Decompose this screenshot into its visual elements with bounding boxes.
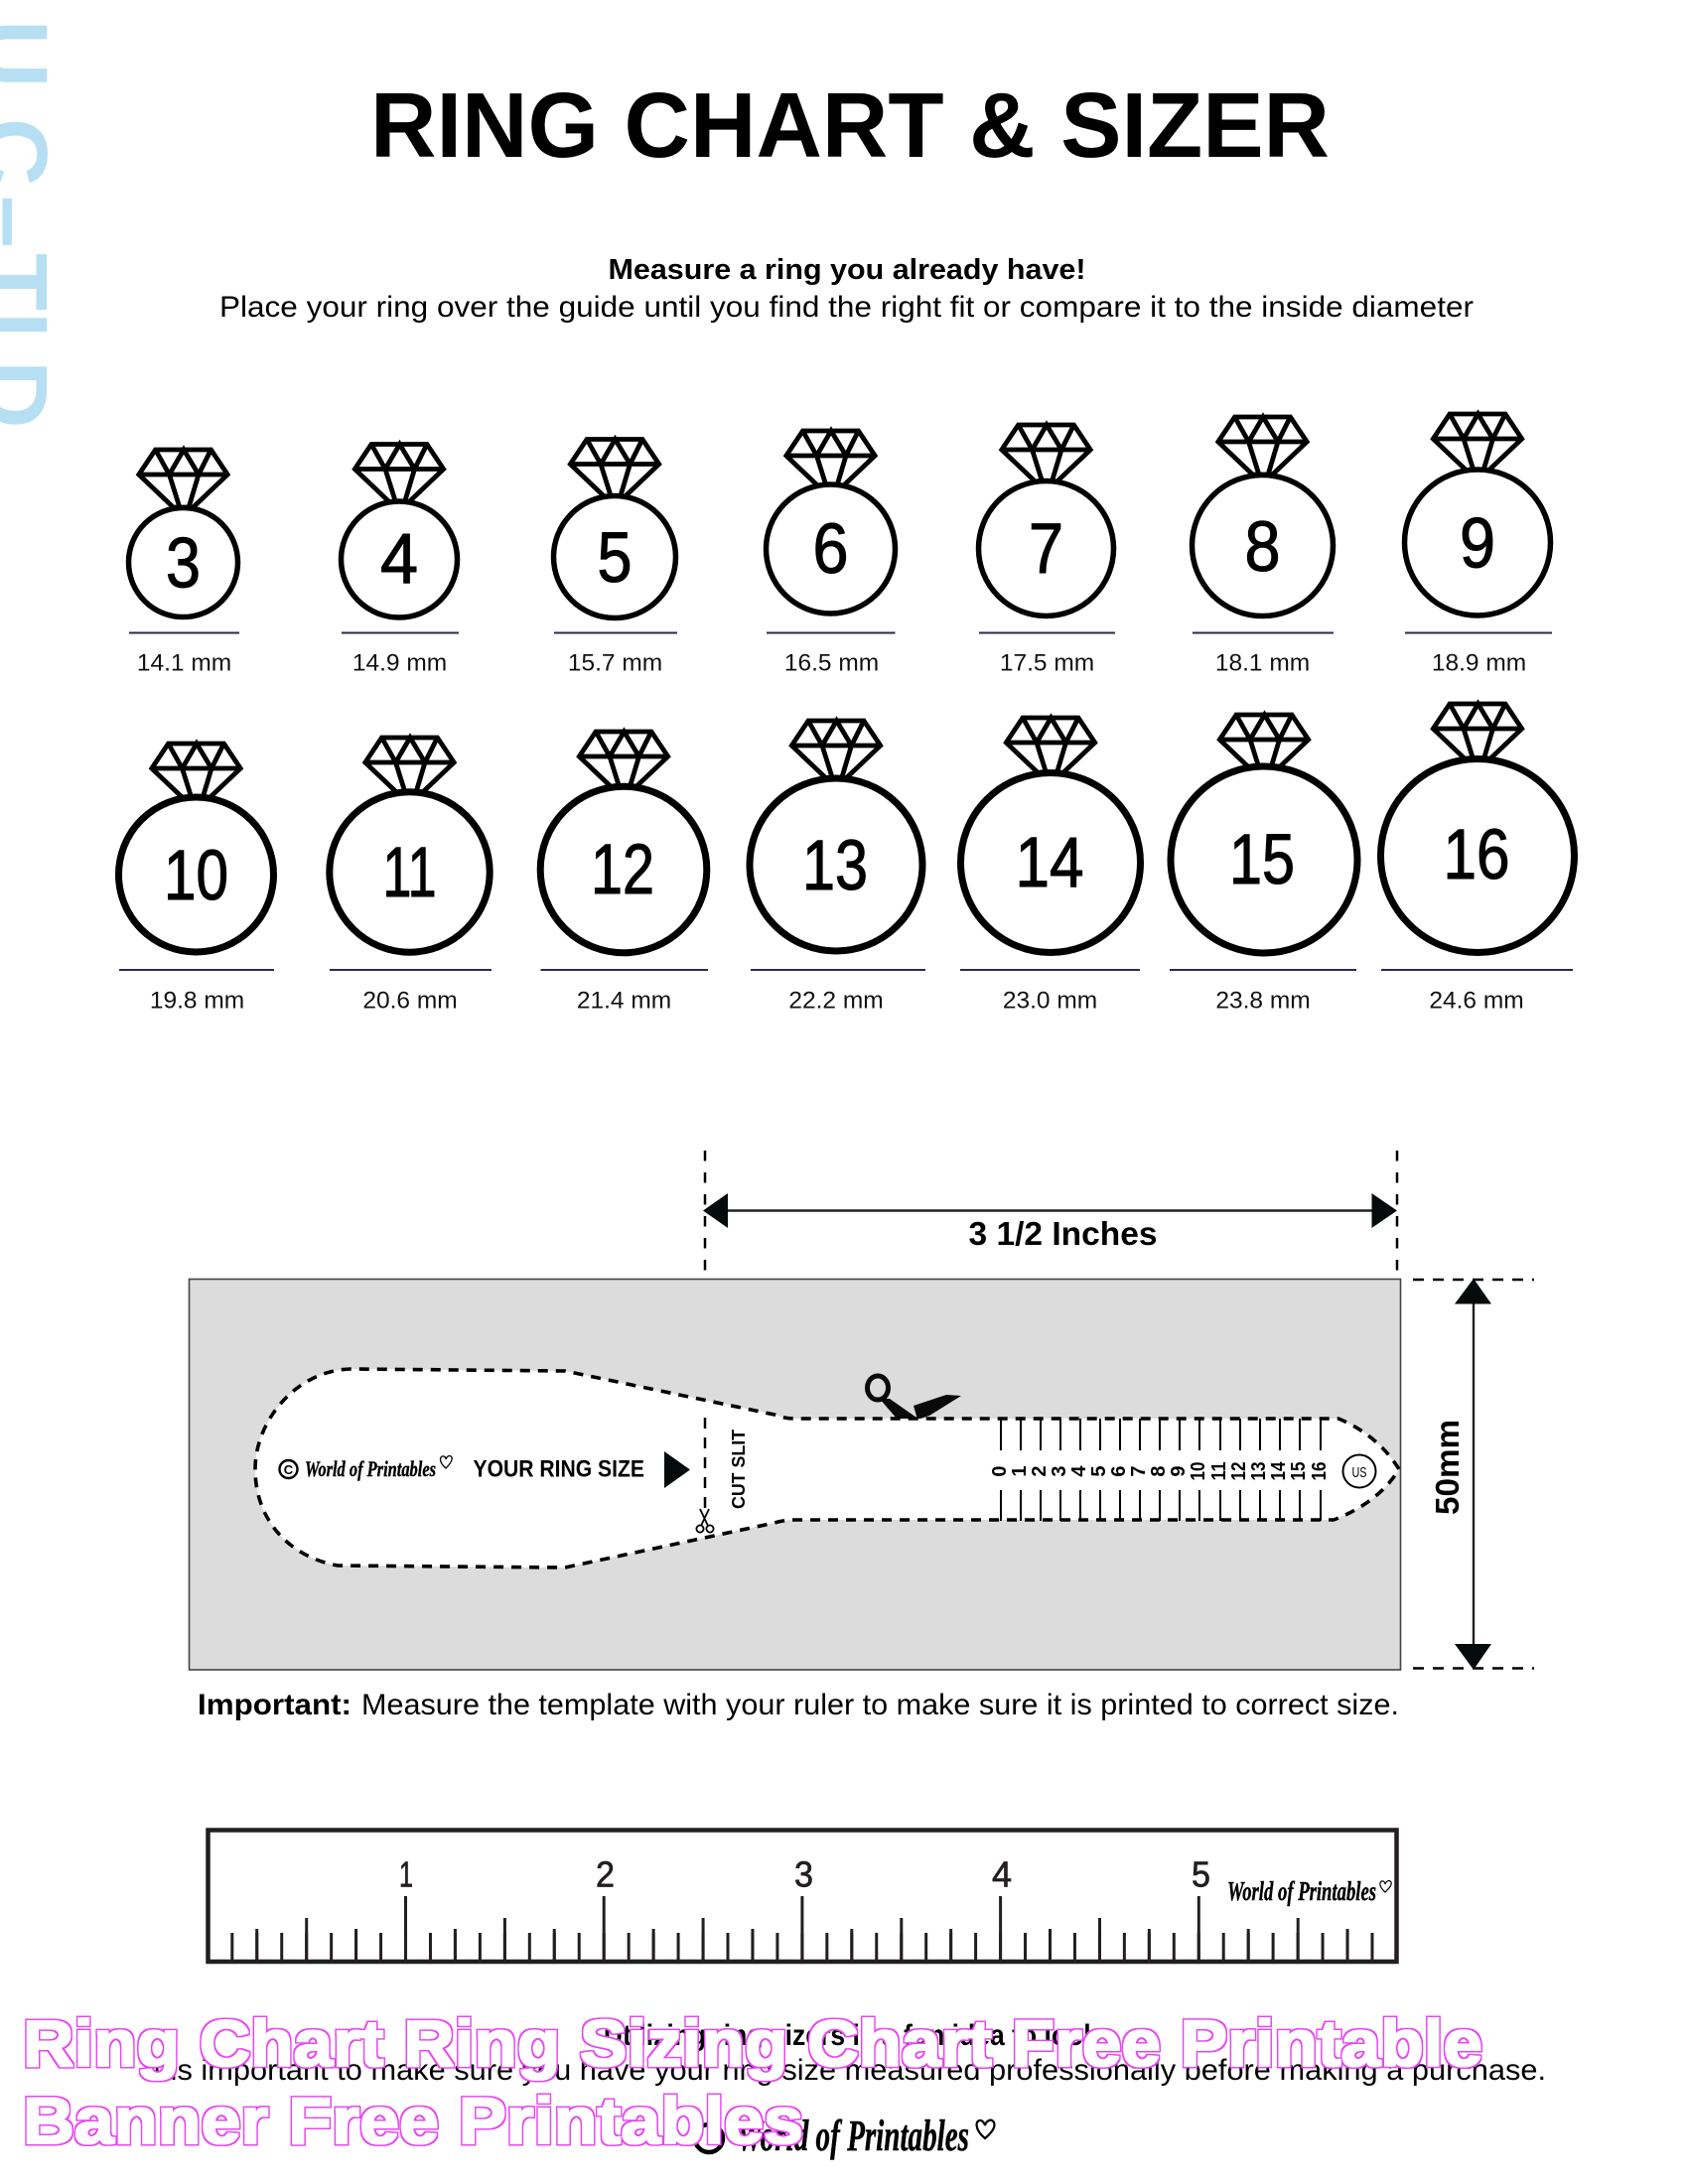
ring size 5 — [554, 439, 677, 677]
footer heading: Utilizing ring sizers is a fun idea to look — [604, 2019, 1098, 2052]
ring size 12: 21.4 mm — [577, 987, 671, 1015]
ring size 4: 4 — [380, 520, 418, 599]
ring size 8: 18.1 mm — [1215, 649, 1310, 677]
ring size 11: 20.6 mm — [362, 987, 458, 1015]
ring size 15: 15 — [1229, 821, 1295, 899]
ring size 8: 8 — [1245, 508, 1281, 587]
sizer numbers: 12 — [1228, 1461, 1250, 1481]
sizer numbers: 5 — [1088, 1465, 1110, 1477]
ruler — [209, 1831, 1396, 1962]
footer logo — [695, 2112, 994, 2160]
ruler half ticks — [305, 1918, 1311, 1961]
ring size 11 — [330, 738, 492, 1015]
ring size 16 — [1380, 704, 1575, 1015]
banner overlay text — [23, 2006, 1482, 2157]
ring size 7: 17.5 mm — [1000, 649, 1094, 677]
US badge — [1342, 1455, 1376, 1487]
strip logo: C — [284, 1462, 294, 1477]
sizer numbers: 3 — [1049, 1465, 1070, 1477]
ring size 3 — [129, 450, 239, 677]
sizer numbers: 15 — [1288, 1461, 1310, 1481]
banner overlay text: Ring Chart Ring Sizing Chart Free Printable — [23, 2006, 1482, 2080]
arrow: 3 1/2 inches dimension: 3 1/2 Inches — [969, 1215, 1158, 1252]
ruler numbers: 2 — [596, 1854, 615, 1894]
ruler numbers — [399, 1854, 1210, 1894]
ruler eighth ticks — [230, 1933, 1380, 1961]
footer paragraph: It is important to make sure you have your ring size measured professionally before making a purchase. — [145, 2054, 1546, 2087]
cut slit label: CUT SLIT — [729, 1430, 749, 1509]
instructions text block — [219, 254, 1474, 324]
sizer numbers: 4 — [1068, 1465, 1090, 1477]
ruler numbers: 1 — [399, 1854, 413, 1894]
ring size 13: 22.2 mm — [788, 987, 884, 1015]
pointer triangle — [664, 1451, 690, 1488]
sizer numbers: 13 — [1248, 1461, 1270, 1481]
ring size 13: 13 — [802, 827, 868, 905]
ring size 4: 14.9 mm — [352, 649, 447, 677]
ring size 9: 18.9 mm — [1432, 649, 1526, 677]
sizer numbers: 10 — [1188, 1461, 1209, 1481]
your ring size label: YOUR RING SIZE — [473, 1455, 644, 1483]
ring size 5: 5 — [598, 519, 632, 598]
footer logo: World of Printables — [737, 2112, 969, 2160]
ring size 16: 16 — [1444, 816, 1509, 894]
important note: Measure the template with your ruler to make sure it is printed to correct size. — [361, 1689, 1399, 1721]
arrow: 50mm dimension: 50mm — [1429, 1420, 1466, 1515]
ring size 12 — [540, 732, 708, 1015]
panel: grey sizer template — [189, 1279, 1400, 1670]
ring size 10: 19.8 mm — [150, 987, 244, 1015]
ring size 9: 9 — [1460, 504, 1495, 584]
sizer ticks — [1001, 1419, 1321, 1521]
ring size 3: 3 — [166, 524, 201, 604]
ruler inch ticks — [404, 1896, 1206, 1961]
ring size 4 — [342, 445, 459, 677]
sizer numbers: 1 — [1009, 1465, 1031, 1477]
ruler numbers: 3 — [794, 1854, 813, 1894]
sizer numbers — [989, 1461, 1331, 1481]
strip logo: World of Printables — [305, 1456, 436, 1481]
sizer numbers: 6 — [1108, 1465, 1130, 1477]
ruler numbers: 4 — [992, 1854, 1012, 1894]
ring size 16: 24.6 mm — [1429, 987, 1524, 1015]
sizer numbers: 9 — [1168, 1465, 1190, 1477]
title: RING CHART & SIZER — [370, 73, 1330, 177]
arrow: 50mm dimension — [1413, 1279, 1534, 1670]
ring size 3: 14.1 mm — [137, 649, 231, 677]
ring size 5: 15.7 mm — [568, 649, 662, 677]
ring size 14: 14 — [1015, 824, 1084, 902]
instructions text block: Measure a ring you already have! — [608, 254, 1086, 286]
sizer numbers: 7 — [1128, 1465, 1150, 1477]
sizer numbers: 8 — [1148, 1465, 1170, 1477]
sizer numbers: 16 — [1309, 1461, 1331, 1481]
arrow: 3 1/2 inches dimension — [703, 1151, 1397, 1272]
sizer numbers: 2 — [1029, 1465, 1051, 1477]
ring size 12: 12 — [591, 831, 654, 909]
cut slit dashed line — [704, 1418, 706, 1509]
icon: small scissors — [696, 1509, 714, 1533]
ring sizer strip cut-out — [255, 1369, 1399, 1568]
important note: Important: — [198, 1689, 352, 1721]
sizer numbers: 14 — [1268, 1461, 1290, 1481]
ring size 10: 10 — [164, 837, 228, 915]
ruler logo: World of Printables — [1227, 1876, 1376, 1906]
ring size 6 — [767, 431, 896, 677]
ring size 9 — [1404, 414, 1552, 677]
US badge: US — [1352, 1464, 1366, 1481]
ring size 14: 23.0 mm — [1003, 987, 1097, 1015]
instructions text block: Place your ring over the guide until you find the right fit or compare it to the inside diameter — [219, 291, 1474, 324]
ring size 6: 16.5 mm — [784, 649, 879, 677]
ruler quarter ticks — [255, 1929, 1380, 1961]
ring size 6: 6 — [812, 510, 848, 589]
ring size 10 — [119, 744, 274, 1015]
ring size 8 — [1192, 417, 1334, 677]
icon: large scissors — [868, 1376, 961, 1420]
sizer numbers: 11 — [1208, 1461, 1230, 1481]
ring size 7 — [979, 425, 1115, 677]
sizer numbers: 0 — [989, 1465, 1011, 1477]
ring size 13 — [750, 721, 925, 1015]
ruler numbers: 5 — [1192, 1854, 1210, 1894]
ring size 14 — [960, 718, 1140, 1015]
banner overlay text: Banner Free Printables — [23, 2084, 803, 2157]
ring size 11: 11 — [383, 834, 437, 912]
ring size 15 — [1170, 715, 1357, 1015]
ring size 15: 23.8 mm — [1215, 987, 1311, 1015]
ring size 7: 7 — [1029, 510, 1063, 589]
